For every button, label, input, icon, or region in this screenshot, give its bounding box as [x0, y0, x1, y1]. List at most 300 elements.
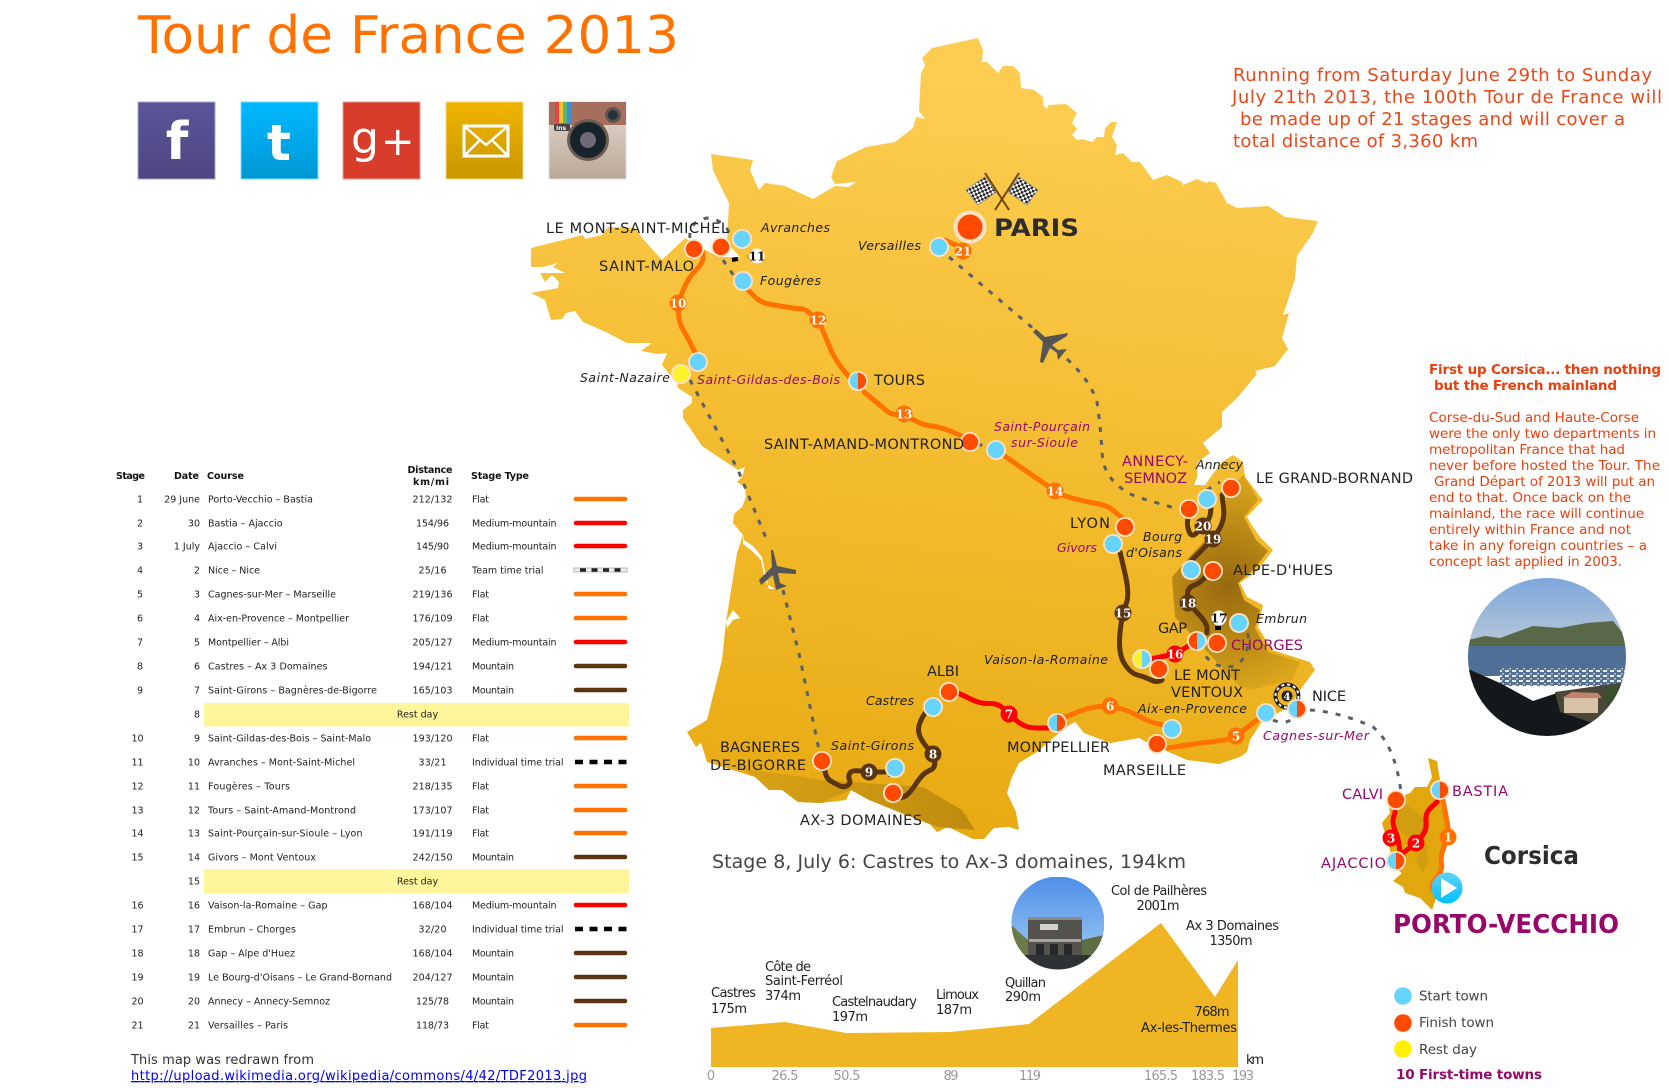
table row 17: Embrun – Chorges	[208, 924, 296, 936]
route stage 10: 10	[670, 296, 686, 310]
icon: twitter	[241, 102, 318, 179]
table header: km/mi	[413, 477, 449, 488]
route stage 3: 3	[1387, 832, 1395, 846]
elevation chart: 0	[707, 1069, 715, 1084]
table row 2	[137, 518, 625, 530]
route stage 17: 17	[1211, 612, 1227, 626]
table row 14	[131, 828, 625, 840]
town labels: VENTOUX	[1171, 685, 1243, 701]
town labels: ANNECY-	[1122, 454, 1188, 470]
table row 9: 9	[137, 686, 143, 696]
table row 1	[137, 494, 625, 506]
table row 13: 173/107	[412, 806, 452, 816]
table row 15: 15	[131, 852, 144, 864]
Arcachon basin	[726, 610, 740, 628]
table row 6: 6	[137, 614, 143, 624]
route stage 4: 4	[1284, 692, 1291, 703]
route stage 4	[1276, 684, 1298, 708]
elevation chart: 175m	[711, 1002, 747, 1017]
icon: facebook	[138, 102, 215, 179]
marker: Alpe d'Huez	[1203, 561, 1223, 581]
route stage 14	[996, 450, 1122, 518]
legend: finish town: Finish town	[1419, 1015, 1494, 1031]
town labels: Saint-Pourçain	[994, 419, 1090, 434]
legend	[1394, 987, 1542, 1083]
marker: Annecy	[1197, 489, 1217, 509]
legend: rest day	[1394, 1040, 1477, 1058]
table row 9: 165/103	[412, 686, 452, 696]
table row 18: 168/104	[412, 948, 452, 960]
elevation chart: Castelnaudary	[832, 995, 917, 1010]
table row 2: Medium-mountain	[472, 518, 556, 530]
table row 8: 8	[137, 662, 143, 672]
elevation chart: km	[1246, 1053, 1264, 1068]
marker: Fougeres	[733, 271, 753, 291]
marker: Gap	[1187, 631, 1207, 651]
table row 11: 33/21	[418, 758, 446, 768]
town labels: Vaison-la-Romaine	[984, 652, 1108, 667]
table row 9	[137, 686, 625, 696]
elevation chart: Ax 3 Domaines	[1186, 919, 1279, 934]
table row 19	[131, 972, 625, 984]
route stage 10	[670, 253, 703, 355]
elevation chart: 193	[1232, 1069, 1254, 1084]
route stage 15: 15	[1115, 606, 1131, 620]
elevation chart: Col de Pailhères	[1111, 884, 1207, 899]
town labels: DE-BIGORRE	[710, 758, 806, 774]
table row 7	[137, 638, 625, 648]
route stage 18: 18	[1180, 596, 1196, 610]
table row: rest day 8	[194, 703, 629, 726]
icon: plane west	[759, 550, 796, 590]
town labels: Givors	[1057, 540, 1097, 555]
icon: chequered flags	[966, 173, 1038, 210]
town labels: SAINT-MALO	[599, 259, 694, 275]
town labels: Castres	[866, 693, 914, 708]
stage table	[116, 465, 629, 1032]
table row 4: 25/16	[418, 566, 446, 576]
table row 10: 10	[131, 734, 144, 744]
table row 1: 29 June	[164, 494, 200, 506]
town labels: TOURS	[873, 373, 925, 389]
table row 21	[131, 1020, 625, 1032]
table row 6: 4	[194, 614, 200, 624]
table row 16: 16	[131, 900, 144, 912]
marker: Mont Ventoux	[1149, 659, 1169, 679]
table row 11: 11	[131, 758, 144, 768]
table row 11	[131, 758, 627, 768]
photo: Corsican harbour	[1468, 578, 1626, 736]
marker: Ax-3 Domaines	[883, 783, 903, 803]
table row 14: Saint-Pourçain-sur-Sioule – Lyon	[208, 828, 362, 840]
table row 7: Medium-mountain	[472, 638, 556, 648]
marker: Castres	[923, 697, 943, 717]
route stage 7: 7	[1005, 708, 1013, 722]
town labels: NICE	[1312, 689, 1346, 705]
table row 1: 1	[137, 494, 143, 506]
icon: facebook: f	[166, 112, 190, 172]
intro text: total distance of 3,360 km	[1233, 131, 1478, 152]
marker: Tours	[848, 371, 868, 391]
map of France	[531, 38, 1508, 910]
table row 3: 1 July	[174, 542, 200, 552]
town labels: BAGNERES	[720, 740, 800, 756]
marker: Lyon	[1115, 517, 1135, 537]
route stage 9	[825, 764, 885, 787]
table row 2: 154/96	[416, 518, 449, 530]
table row 4: Nice – Nice	[208, 566, 260, 576]
table row 18: Mountain	[472, 948, 514, 960]
Corsica island	[1382, 758, 1450, 910]
legend: finish town	[1394, 1014, 1494, 1032]
route stage 18	[1180, 575, 1207, 633]
table row 5: 5	[137, 590, 143, 600]
table row 15	[131, 852, 625, 864]
table row 17: Individual time trial	[472, 924, 564, 936]
icon: google plus: +	[381, 119, 415, 165]
marker: Bagneres-de-Bigorre	[812, 751, 832, 771]
table row 10: Saint-Gildas-des-Bois – Saint-Malo	[208, 734, 371, 744]
route stage 16	[1150, 645, 1190, 662]
table row 9: Mountain	[472, 686, 514, 696]
table row 3: Ajaccio – Calvi	[208, 542, 277, 552]
marker: Chorges	[1207, 633, 1227, 653]
table row 21: 21	[131, 1020, 144, 1032]
route stage 3	[1382, 812, 1400, 852]
table row 8: 6	[194, 662, 200, 672]
table row 12: Fougères – Tours	[208, 782, 290, 792]
table row 18: 18	[188, 948, 200, 960]
Gironde estuary	[743, 535, 775, 589]
town markers	[671, 210, 1462, 904]
marker: Saint-Gildas-des-Bois	[688, 352, 708, 372]
town labels: LE GRAND-BORNAND	[1256, 471, 1413, 487]
elevation chart: 119	[1019, 1069, 1041, 1084]
route stage 7	[949, 691, 1048, 728]
table row 13: 13	[131, 806, 144, 816]
table row 15: 242/150	[412, 852, 452, 864]
intro text: July 21th 2013, the 100th Tour de France will	[1231, 87, 1662, 108]
town labels: SAINT-AMAND-MONTROND	[764, 437, 964, 453]
table row 2: Bastia – Ajaccio	[208, 518, 283, 530]
town labels: Avranches	[760, 220, 830, 235]
table row 2: 30	[188, 518, 200, 530]
table row 10: 193/120	[412, 734, 452, 744]
town labels: AJACCIO	[1321, 856, 1386, 872]
Corsica text block: Grand Départ of 2013 will put an	[1434, 474, 1655, 490]
table row 12: 11	[188, 782, 200, 792]
table row 14: 13	[188, 828, 200, 840]
table row 20: Annecy – Annecy-Semnoz	[208, 996, 330, 1008]
elevation chart	[707, 884, 1279, 1084]
marker: Bastia	[1430, 780, 1450, 800]
table header: Distance	[408, 465, 452, 476]
table row 4: 2	[194, 566, 200, 576]
table row 20: 20	[188, 996, 200, 1008]
Corsica text block	[1429, 362, 1661, 570]
town labels: ALBI	[927, 664, 959, 680]
town labels: Annecy	[1195, 457, 1244, 472]
elevation chart: 187m	[936, 1003, 972, 1018]
social icons	[138, 102, 626, 179]
marker: Saint-Nazaire	[671, 364, 691, 384]
Corsica text block: concept last applied in 2003.	[1429, 554, 1622, 570]
table row 13: 12	[188, 806, 200, 816]
photo: mountain pass building	[1011, 877, 1104, 970]
table row 15: Mountain	[472, 852, 514, 864]
route stage 5	[1168, 720, 1257, 748]
table row 15: Givors – Mont Ventoux	[208, 852, 316, 864]
table row 12: 12	[131, 782, 144, 792]
table row 5: Cagnes-sur-Mer – Marseille	[208, 590, 336, 600]
table row: rest day 15: Rest day	[397, 876, 438, 888]
legend: rest day: Rest day	[1419, 1042, 1477, 1058]
marker: Calvi	[1386, 790, 1406, 810]
Corsica text block: but the French mainland	[1434, 378, 1617, 394]
town labels: GAP	[1158, 621, 1187, 637]
route stage 1	[1432, 800, 1456, 893]
table row 14: 191/119	[412, 828, 452, 840]
marker: Saint-Girons	[885, 758, 905, 778]
elevation chart: 50.5	[834, 1069, 860, 1084]
table row 8: Castres – Ax 3 Domaines	[208, 662, 328, 672]
Corsica text block: mainland, the race will continue	[1429, 506, 1644, 522]
table row 3: 145/90	[416, 542, 449, 552]
elevation chart: Castres	[711, 986, 756, 1001]
stage 8 profile heading: Stage 8, July 6: Castres to Ax-3 domaines, 194km	[712, 851, 1186, 873]
route stage 8: 8	[929, 748, 937, 762]
Corsica text block: First up Corsica... then nothing	[1429, 362, 1661, 378]
elevation chart: 89	[944, 1069, 958, 1084]
elevation chart: 1350m	[1210, 934, 1252, 949]
route stage 12	[748, 290, 849, 377]
elevation chart: 290m	[1005, 990, 1041, 1005]
source credit: This map was redrawn from	[130, 1053, 314, 1068]
elevation chart: 2001m	[1136, 899, 1180, 914]
route stage 5: 5	[1232, 730, 1240, 744]
table row 14: Flat	[472, 828, 489, 840]
route stage 19	[1192, 495, 1224, 560]
legend: first-time towns: 10 First-time towns	[1396, 1067, 1542, 1083]
table header: Stage	[116, 471, 145, 482]
route stage 6: 6	[1106, 700, 1114, 714]
table row 3: 3	[137, 542, 143, 552]
panel: France outline	[531, 38, 1318, 839]
table row 16: Medium-mountain	[472, 900, 556, 912]
route stage 8	[892, 707, 942, 797]
table row 10: Flat	[472, 734, 489, 744]
marker: Marseille	[1147, 734, 1167, 754]
Corsica text block: were the only two departments in	[1429, 426, 1656, 442]
route stage 21: 21	[955, 244, 971, 258]
heading: Corsica: Corsica	[1484, 841, 1579, 870]
town labels: Cagnes-sur-Mer	[1263, 728, 1370, 743]
table row: rest day 8: 8	[194, 710, 200, 720]
table row 7: 205/127	[412, 638, 452, 648]
route stage 6	[1063, 698, 1163, 725]
title: Tour de France 2013	[137, 6, 679, 66]
icon: google plus	[343, 102, 420, 179]
town labels: ALPE-D'HUES	[1233, 563, 1333, 579]
marker: Annecy-Semnoz	[1179, 499, 1199, 519]
town labels: Embrun	[1256, 611, 1307, 626]
table row 6: Aix-en-Provence – Montpellier	[208, 614, 349, 624]
table row 1: Porto-Vecchio – Bastia	[208, 494, 313, 506]
table row 12	[131, 782, 625, 792]
Alps relief	[1172, 475, 1300, 690]
route stage 15	[1114, 552, 1162, 682]
town labels: Aix-en-Provence	[1137, 701, 1247, 716]
elevation chart: 26.5	[772, 1069, 798, 1084]
town labels: Bourg	[1143, 529, 1182, 544]
Corsica text block: entirely within France and not	[1429, 522, 1631, 538]
route stage 2: 2	[1412, 836, 1420, 850]
table row: rest day 15	[188, 869, 629, 893]
table row 18: Gap – Alpe d'Huez	[208, 948, 295, 960]
table row 21: 21	[188, 1020, 200, 1032]
elevation chart: Côte de	[765, 960, 811, 975]
town labels: LE MONT-SAINT-MICHEL	[546, 221, 729, 237]
route stage 21	[945, 240, 972, 260]
marker: Saint-Pourcain	[986, 440, 1006, 460]
table row 2: 2	[137, 518, 143, 530]
elevation chart: 768m	[1194, 1005, 1230, 1020]
table row 5	[137, 590, 625, 600]
heading: Porto-Vecchio: PORTO-VECCHIO	[1393, 910, 1619, 940]
elevation chart: Quillan	[1005, 976, 1046, 991]
table row 11: Avranches – Mont-Saint-Michel	[208, 758, 355, 768]
table row 8: Mountain	[472, 662, 514, 672]
marker: Porto-Vecchio play button	[1432, 872, 1462, 904]
Corsica text block: never before hosted the Tour. The	[1429, 458, 1660, 474]
marker: Embrun	[1229, 613, 1249, 633]
table row 1: Flat	[472, 494, 489, 506]
marker: Montpellier	[1047, 713, 1067, 733]
table row 5: Flat	[472, 590, 489, 600]
table row 19: 19	[131, 972, 144, 984]
table row: rest day 15: 15	[188, 876, 200, 888]
table row 1: 212/132	[412, 494, 452, 506]
table row 10	[131, 734, 625, 744]
table row 13	[131, 806, 625, 816]
table row 15: 14	[188, 852, 200, 864]
table row 17	[131, 924, 627, 936]
table row 12: Flat	[472, 782, 489, 792]
table row 21: Flat	[472, 1020, 489, 1032]
table row 18	[131, 948, 625, 960]
source credit: http://upload.wikimedia.org/wikipedia/commons/4/42/TDF2013.jpg	[131, 1069, 587, 1084]
marker: Aix-en-Provence	[1162, 719, 1182, 739]
marker: Versailles	[929, 237, 949, 257]
table row 4	[137, 566, 627, 576]
table row 11: Individual time trial	[472, 758, 564, 768]
table row 18: 18	[131, 948, 144, 960]
town labels: Versailles	[858, 238, 921, 253]
town labels: MARSEILLE	[1103, 763, 1186, 779]
table row 20: 125/78	[416, 996, 449, 1008]
table row 21: 118/73	[416, 1020, 449, 1032]
table header: Stage Type	[471, 471, 529, 482]
table row 6: Flat	[472, 614, 489, 624]
icon: twitter: t	[267, 114, 291, 172]
elevation chart: 165.5	[1144, 1069, 1178, 1084]
elevation chart: 183.5	[1191, 1069, 1225, 1084]
town labels: CHORGES	[1231, 638, 1303, 654]
town labels: CALVI	[1342, 787, 1383, 803]
route stage 13: 13	[896, 408, 912, 422]
town labels: sur-Sioule	[1011, 435, 1078, 450]
table row 21: Versailles – Paris	[208, 1020, 288, 1032]
route stage 11: 11	[749, 250, 765, 264]
table row 19: 19	[188, 972, 200, 984]
route stage 19: 19	[1205, 532, 1221, 546]
table row 9: 7	[194, 686, 200, 696]
intro text: be made up of 21 stages and will cover a	[1240, 109, 1625, 130]
marker: Givors	[1103, 534, 1123, 554]
Corsica text block: Corse-du-Sud and Haute-Corse	[1429, 410, 1639, 426]
elevation chart: 374m	[765, 989, 801, 1004]
marker: Saint-Malo	[684, 239, 704, 259]
town labels: LYON	[1070, 516, 1110, 532]
icon: instagram: Ins	[556, 125, 567, 132]
route stage 11	[732, 248, 765, 264]
table row 7: 7	[137, 638, 143, 648]
route stage 2	[1403, 802, 1437, 853]
Corsica text block: end to that. Once back on the	[1429, 490, 1631, 506]
marker: Albi	[939, 682, 959, 702]
elevation chart: 197m	[832, 1010, 868, 1025]
town labels: Fougères	[760, 273, 821, 288]
legend: start town: Start town	[1419, 988, 1488, 1004]
table row 17: 17	[188, 924, 200, 936]
town labels: Saint-Girons	[831, 738, 914, 753]
icon: mail	[446, 102, 523, 179]
town labels: BASTIA	[1452, 784, 1508, 800]
town labels: AX-3 DOMAINES	[800, 813, 922, 829]
marker: Bourg d'Oisans	[1181, 560, 1201, 580]
marker: Avranches	[732, 229, 752, 249]
table row 14: 14	[131, 828, 144, 840]
legend: start town	[1394, 987, 1488, 1005]
table row 16: Vaison-la-Romaine – Gap	[208, 900, 328, 912]
table row 16: 168/104	[412, 900, 452, 912]
table row 3: Medium-mountain	[472, 542, 556, 552]
town labels: Saint-Gildas-des-Bois	[697, 372, 840, 387]
table row 13: Tours – Saint-Amand-Montrond	[207, 806, 356, 816]
Corsica text block: take in any foreign countries – a	[1429, 538, 1647, 554]
marker: Paris	[954, 210, 986, 244]
table row 6	[137, 614, 625, 624]
marker: Cagnes-sur-Mer	[1256, 703, 1276, 723]
marker: Vaison-la-Romaine	[1132, 649, 1152, 669]
icon: plane north	[1033, 329, 1068, 363]
table row 6: 176/109	[412, 614, 452, 624]
marker: Le Grand-Bornand	[1221, 478, 1241, 498]
table row 4: Team time trial	[471, 566, 544, 576]
Pyrenees relief	[741, 768, 975, 830]
route stage 20: 20	[1195, 520, 1211, 534]
table row 7: Montpellier – Albi	[208, 638, 289, 648]
marker: Nice	[1287, 699, 1307, 719]
town labels	[546, 214, 1508, 872]
table row 20: 20	[131, 996, 144, 1008]
town labels: Saint-Nazaire	[580, 370, 670, 385]
table row 3	[137, 542, 625, 552]
table row 16	[131, 900, 625, 912]
town labels: d'Oisans	[1126, 545, 1182, 560]
table row 20	[131, 996, 625, 1008]
intro text	[1231, 65, 1662, 152]
